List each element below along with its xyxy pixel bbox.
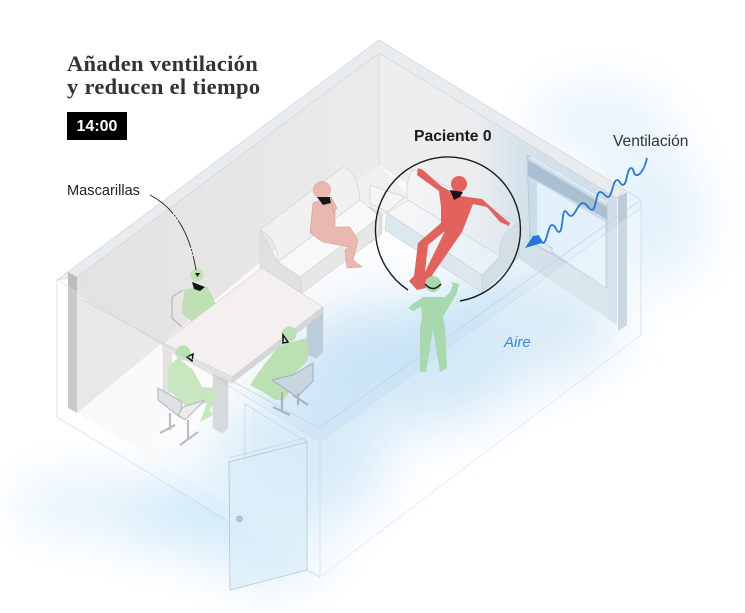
title <box>67 51 260 99</box>
chair: front right <box>272 363 313 415</box>
title: y reducen el tiempo <box>67 74 260 99</box>
person: seated back, pink <box>310 182 362 268</box>
chair: front left <box>158 388 205 445</box>
person: seated at table back, green <box>172 268 215 327</box>
time badge: 14:00 <box>77 118 118 135</box>
title: Añaden ventilación <box>67 51 258 76</box>
door <box>229 404 307 590</box>
person: standing, green <box>408 276 459 372</box>
sofa: right section <box>385 169 520 292</box>
transparent front walls <box>57 190 641 577</box>
person: seated front left, green <box>168 346 217 422</box>
wall end cap right <box>618 192 627 331</box>
window <box>527 155 607 288</box>
highlight circle <box>375 157 520 301</box>
label: Ventilación: Ventilación <box>613 133 688 150</box>
label: Mascarillas: Mascarillas <box>67 183 140 199</box>
wall end cap left <box>68 272 77 413</box>
label: Aire: Aire <box>503 334 531 351</box>
sofa: left section <box>260 167 380 293</box>
time badge <box>67 112 127 140</box>
room <box>57 40 627 560</box>
right back wall <box>379 53 617 325</box>
floor <box>77 165 617 560</box>
corner behind the sofas <box>345 165 410 217</box>
arrow: ventilation <box>525 158 647 248</box>
door knob <box>237 516 242 522</box>
person: seated front right, green <box>250 326 308 400</box>
side table <box>370 185 405 243</box>
table <box>163 268 323 433</box>
wall top rim <box>57 40 625 280</box>
leader line: Mascarillas <box>150 195 196 270</box>
left back wall <box>77 53 379 413</box>
label: Paciente 0: Paciente 0 <box>414 128 492 145</box>
person: patient zero, red <box>409 168 510 290</box>
background air clouds <box>15 88 705 581</box>
